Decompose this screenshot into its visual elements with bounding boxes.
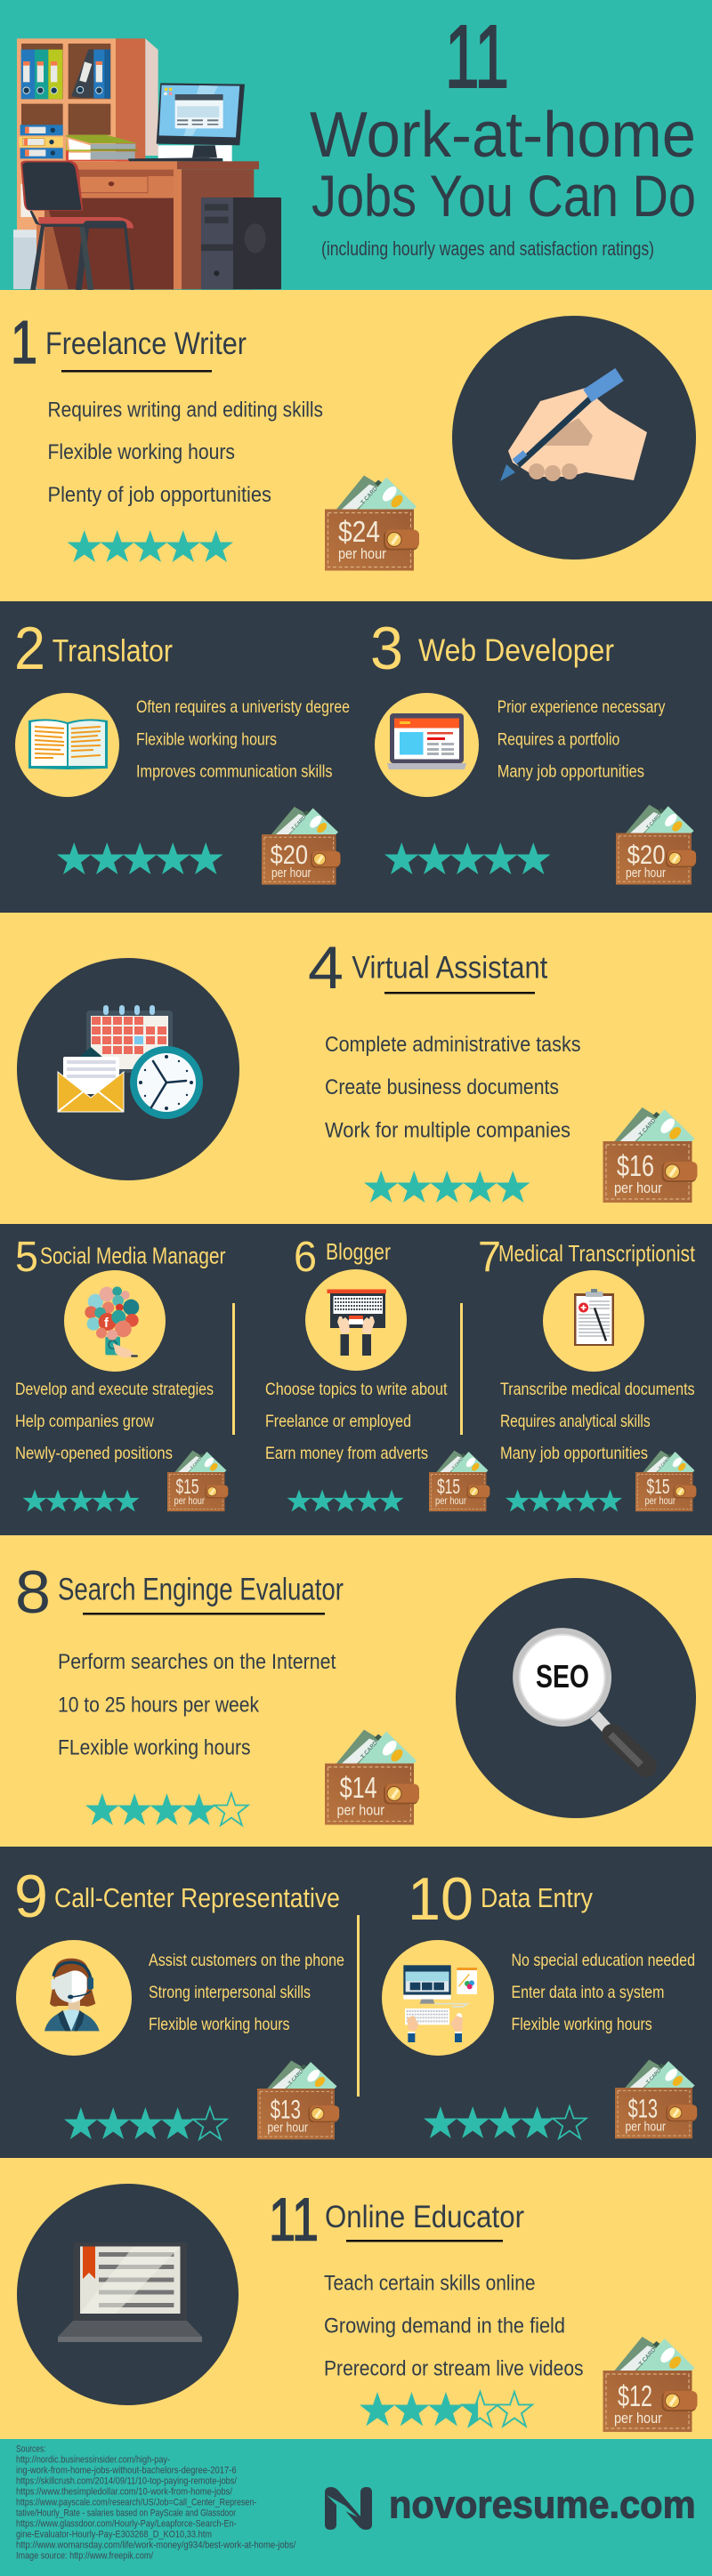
sources list: https://www.payscale.com/research/US/Job=Call_Center_Represen- (16, 2498, 257, 2508)
bullet list: Freelance or employed (265, 1412, 411, 1431)
bullet list: Work for multiple companies (325, 1119, 570, 1142)
bullet list: Complete administrative tasks (325, 1033, 580, 1057)
wallet $12: $12 (618, 2379, 652, 2412)
number 4: 4 (308, 934, 344, 1002)
bullet list: Create business documents (325, 1075, 559, 1099)
bullet list: Many job opportunities (498, 762, 644, 782)
wallet $15: per hour (435, 1494, 466, 1507)
bullet list (498, 697, 666, 782)
heading: Online Educator (325, 2200, 524, 2234)
bullet list: Choose topics to write about (265, 1380, 448, 1399)
bullet list: Develop and execute strategies (15, 1380, 214, 1399)
wallet $12: per hour (614, 2410, 662, 2427)
job 9 call-center representative (14, 1863, 344, 2139)
rating 5 stars (506, 1489, 622, 1511)
bullet list: FLexible working hours (58, 1736, 251, 1760)
bullet list (149, 1951, 344, 2034)
icon: computer and data entry (382, 1940, 494, 2056)
icon: headset agent (16, 1940, 132, 2056)
rating 4 stars (64, 2107, 227, 2139)
icon: SEO magnifier: SEO (536, 1658, 589, 1695)
bullet list (136, 697, 350, 782)
bullet list (48, 398, 323, 507)
wallet $20 (616, 805, 696, 884)
heading: Data Entry (481, 1882, 593, 1913)
illustration: home office desk (13, 38, 281, 291)
wallet $15 (429, 1451, 490, 1511)
sources list: Image source: http://www.freepik.com/ (16, 2551, 154, 2562)
bullet list: Perform searches on the Internet (58, 1650, 336, 1674)
panel: job 11 online educator (0, 2158, 712, 2439)
bullet list (500, 1380, 695, 1463)
sources list: Sources: (16, 2444, 46, 2455)
wallet $14: $14 (340, 1771, 377, 1804)
wallet $12 (603, 2337, 698, 2432)
sources list: http://nordic.businessinsider.com/high-pay- (16, 2455, 170, 2466)
bullet list: Often requires a univeristy degree (136, 697, 350, 717)
bullet list: Teach certain skills online (324, 2272, 536, 2295)
sources list: ing-work-from-home-jobs-without-bachelors-degree-2017-6 (16, 2466, 237, 2476)
wallet $13 (615, 2059, 697, 2138)
bullet list (511, 1951, 695, 2034)
wallet $16: per hour (614, 1179, 662, 1196)
rating 5 stars (364, 1171, 530, 1203)
job 10 data entry (382, 1865, 697, 2138)
icon: laptop with e-book (17, 2184, 239, 2405)
number 7: 7 (478, 1234, 501, 1281)
wallet $24: $24 (338, 515, 380, 548)
panel: jobs 5 6 7 (0, 1224, 712, 1535)
number 11: 11 (269, 2186, 319, 2254)
bullet list: Flexible working hours (48, 440, 235, 464)
number 9: 9 (14, 1863, 48, 1930)
wallet $20 (262, 807, 341, 885)
wallet $15: per hour (644, 1494, 676, 1507)
wallet $20: $20 (627, 841, 666, 870)
panel: job 1 freelance writer (0, 290, 712, 601)
number 3: 3 (370, 615, 403, 682)
icon: social media tree: f (104, 1316, 109, 1331)
rating 4 stars (424, 2106, 587, 2138)
heading: Virtual Assistant (352, 950, 548, 985)
wallet $13: per hour (267, 2121, 308, 2135)
number 6: 6 (294, 1234, 317, 1281)
icon: laptop website (375, 693, 479, 797)
bullet list: Requires writing and editing skills (48, 398, 323, 422)
wallet $15: per hour (174, 1494, 205, 1507)
number 1: 1 (11, 309, 37, 376)
sources list (16, 2444, 296, 2562)
wallet $15: $15 (646, 1475, 669, 1498)
number 10: 10 (408, 1865, 473, 1933)
wallet $14 (325, 1729, 419, 1825)
job 5 social media manager (15, 1234, 228, 1511)
panel: footer (0, 2439, 712, 2576)
bullet list: Flexible working hours (149, 2015, 290, 2034)
heading: Blogger (326, 1238, 391, 1265)
wallet $15 (635, 1451, 696, 1511)
heading: Call-Center Representative (54, 1882, 340, 1913)
bullet list: Earn money from adverts (265, 1444, 428, 1463)
wallet $13: per hour (625, 2119, 666, 2135)
bullet list: Many job opportunities (500, 1444, 648, 1463)
sources list: gine-Evaluator-Hourly-Pay-E303268_D_KO10,33.htm (16, 2530, 212, 2540)
bullet list (58, 1650, 336, 1760)
bullet list: Prerecord or stream live videos (324, 2357, 584, 2380)
wallet $13: $13 (628, 2094, 658, 2124)
wallet $24 (325, 475, 419, 571)
icon: typing on laptop (305, 1269, 407, 1371)
wallet $15 (167, 1451, 228, 1511)
panel: jobs 9 and 10 (0, 1847, 712, 2158)
bullet list: Improves communication skills (136, 762, 333, 782)
bullet list: Newly-opened positions (15, 1444, 173, 1463)
bullet list (325, 1033, 580, 1142)
bullet list: Strong interpersonal skills (149, 1983, 311, 2002)
bullet list (265, 1380, 448, 1463)
wallet $20: per hour (626, 865, 666, 881)
bullet list: Requires a portfolio (498, 729, 620, 749)
panel: header (0, 0, 712, 291)
wallet $20: per hour (271, 865, 312, 881)
icon: clipboard (543, 1270, 644, 1372)
bullet list: Requires analytical skills (500, 1412, 651, 1431)
job 2 translator (14, 615, 350, 885)
icon: hand writing (452, 316, 696, 559)
panel: job 8 search engine evaluator (0, 1535, 712, 1847)
logo: novoresume: novoresume.com (389, 2483, 696, 2526)
wallet $13 (257, 2060, 339, 2139)
rating 5 stars (68, 530, 233, 562)
icon: open book (15, 693, 119, 797)
wallet $14: per hour (336, 1802, 384, 1818)
wallet $15: $15 (437, 1475, 460, 1498)
rating 4 stars (85, 1793, 248, 1825)
icon: social media tree (64, 1270, 166, 1372)
heading: Translator (53, 634, 173, 669)
number 8: 8 (15, 1558, 51, 1626)
bullet list: Flexible working hours (511, 2015, 652, 2034)
heading: Social Media Manager (40, 1242, 226, 1268)
job 3 web developer (370, 615, 696, 884)
wallet $16 (603, 1107, 698, 1203)
rating 5 stars (57, 842, 222, 874)
wallet $13: $13 (271, 2096, 301, 2124)
bullet list: Help companies grow (15, 1412, 155, 1431)
icon: calendar envelope clock (17, 958, 239, 1180)
sources list: tative/Hourly_Rate - salaries based on PayScale and Glassdoor (16, 2508, 236, 2519)
title (310, 7, 696, 229)
panel: jobs 2 and 3 (0, 601, 712, 913)
title: 11 (445, 7, 509, 107)
heading: Freelance Writer (45, 326, 247, 361)
bullet list: Plenty of job opportunities (48, 483, 271, 507)
bullet list: Flexible working hours (136, 729, 277, 749)
sources list: https://skillcrush.com/2014/09/11/10-top-paying-remote-jobs/ (16, 2476, 238, 2487)
heading: Search Enginge Evaluator (58, 1573, 344, 1606)
title: Work-at-home (310, 100, 696, 171)
number 5: 5 (15, 1234, 38, 1281)
bullet list: Assist customers on the phone (149, 1951, 344, 1970)
bullet list (324, 2272, 584, 2380)
bullet list: Enter data into a system (511, 1983, 664, 2002)
number 2: 2 (14, 615, 45, 682)
bullet list: 10 to 25 hours per week (58, 1693, 260, 1717)
wallet $15: $15 (176, 1475, 199, 1498)
wallet $16: $16 (617, 1149, 654, 1182)
icon: SEO magnifier (456, 1578, 696, 1818)
bullet list (15, 1380, 214, 1463)
bullet list: Prior experience necessary (498, 697, 666, 717)
sources list: http://www.womansday.com/life/work-money/g934/best-work-at-home-jobs/ (16, 2540, 296, 2551)
wallet $24: per hour (338, 545, 386, 562)
wallet $20: $20 (271, 841, 308, 870)
panel: job 4 virtual assistant (0, 913, 712, 1224)
rating 5 stars (23, 1489, 140, 1511)
rating 5 stars (287, 1489, 404, 1511)
bullet list: Growing demand in the field (324, 2314, 565, 2338)
job 6 blogger (265, 1234, 490, 1511)
job 7 medical transcriptionist (478, 1234, 696, 1511)
rating 5 stars (384, 842, 550, 874)
sources list: https://www.glassdoor.com/Hourly-Pay/Leapforce-Search-En- (16, 2519, 237, 2530)
heading: Web Developer (418, 633, 614, 668)
sources list: https://www.thesimpledollar.com/10-work-from-home-jobs/ (16, 2487, 233, 2498)
rating 3.5 stars (360, 2392, 532, 2427)
